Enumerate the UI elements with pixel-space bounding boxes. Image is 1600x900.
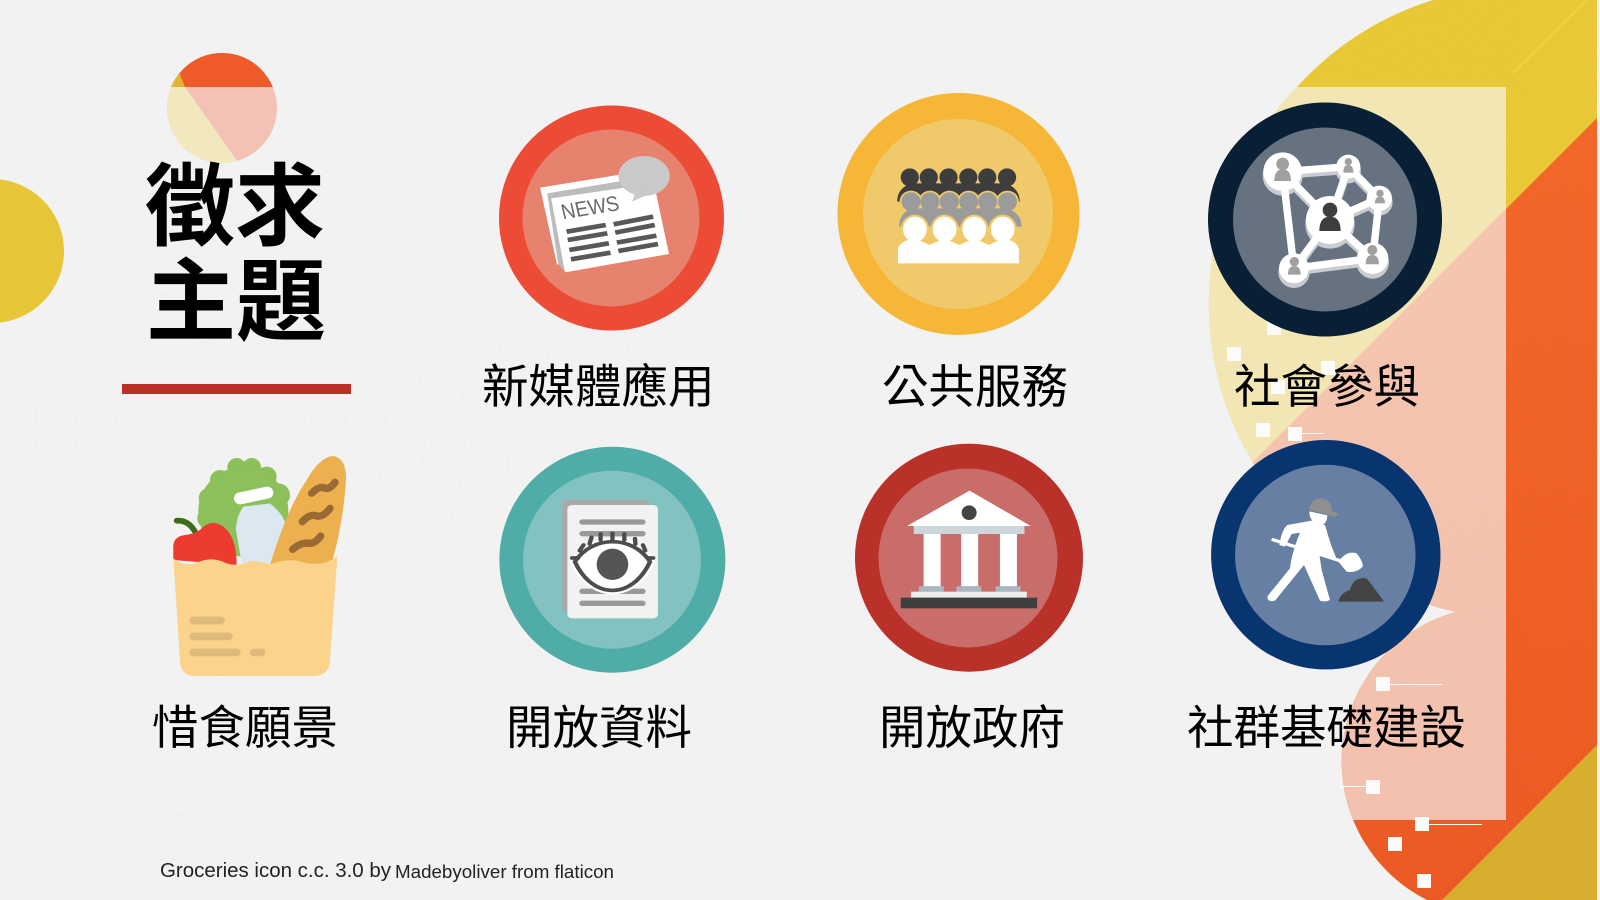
label: open data: 開放資料 [506,702,692,754]
footer credit: Madebyoliver from flaticon [395,862,614,882]
icon: newspaper circle: NEWS [559,193,622,224]
label: public service: 公共服務 [882,361,1068,413]
decoration: right textured shapes [1200,0,1600,900]
icon: network circle [1208,102,1442,336]
decoration: left gold circle [0,180,64,322]
decoration: white squares and lines [1227,321,1482,888]
icon: community infrastructure circle [1211,440,1441,669]
icon: crowd circle [838,93,1080,335]
label: community infrastructure: 社群基礎建設 [1187,702,1466,754]
title underline bar [122,384,351,394]
label: food vision: 惜食願景 [152,702,338,754]
icon: newspaper circle [499,106,724,330]
label: open government: 開放政府 [879,702,1065,754]
footer credit: Groceries icon c.c. 3.0 by [160,860,391,882]
title: 主題 [146,253,326,353]
label: social participation: 社會參與 [1234,361,1420,413]
icon: open government circle [855,444,1083,672]
icon: groceries bag [173,456,346,676]
title [145,158,326,353]
title: 徵求 [145,158,325,258]
icon: open data circle [499,447,725,673]
footer credit [160,860,614,882]
label: new media: 新媒體應用 [482,361,714,413]
decoration: small segmented circle [167,53,277,163]
